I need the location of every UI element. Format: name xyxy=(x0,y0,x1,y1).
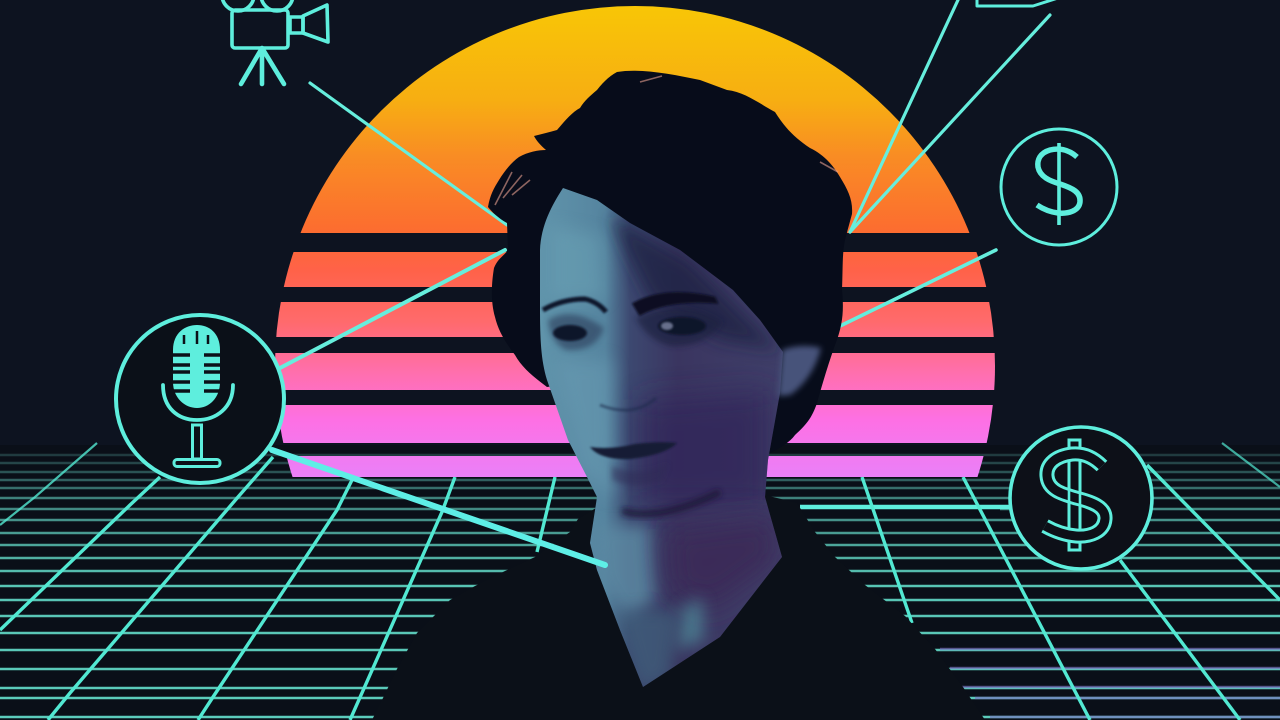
forehead shading xyxy=(610,215,780,350)
neck light area xyxy=(595,525,655,620)
connector lines to icons xyxy=(280,0,1050,368)
shirt and shoulders xyxy=(372,495,985,720)
connector: microphone to neck xyxy=(272,450,605,565)
icon: thin dollar badge xyxy=(1001,129,1117,245)
icon: outlined dollar badge xyxy=(1010,427,1152,569)
left eyebrow xyxy=(543,299,606,312)
perspective grid floor xyxy=(0,443,1280,720)
right eye xyxy=(658,317,706,335)
icon: microphone badge xyxy=(116,315,284,483)
striped retro sun xyxy=(275,6,995,477)
right eyebrow xyxy=(634,294,716,314)
icon: film camera xyxy=(222,0,328,84)
jaw shadow xyxy=(622,492,720,514)
left eye xyxy=(553,325,587,341)
eye sockets xyxy=(548,314,604,350)
face and neck xyxy=(540,188,783,687)
mouth xyxy=(590,442,677,459)
icon: book xyxy=(977,0,1058,6)
hair strands xyxy=(495,76,838,205)
hair xyxy=(488,71,852,453)
nose xyxy=(600,398,656,410)
person portrait xyxy=(372,71,985,720)
ear xyxy=(778,346,821,396)
